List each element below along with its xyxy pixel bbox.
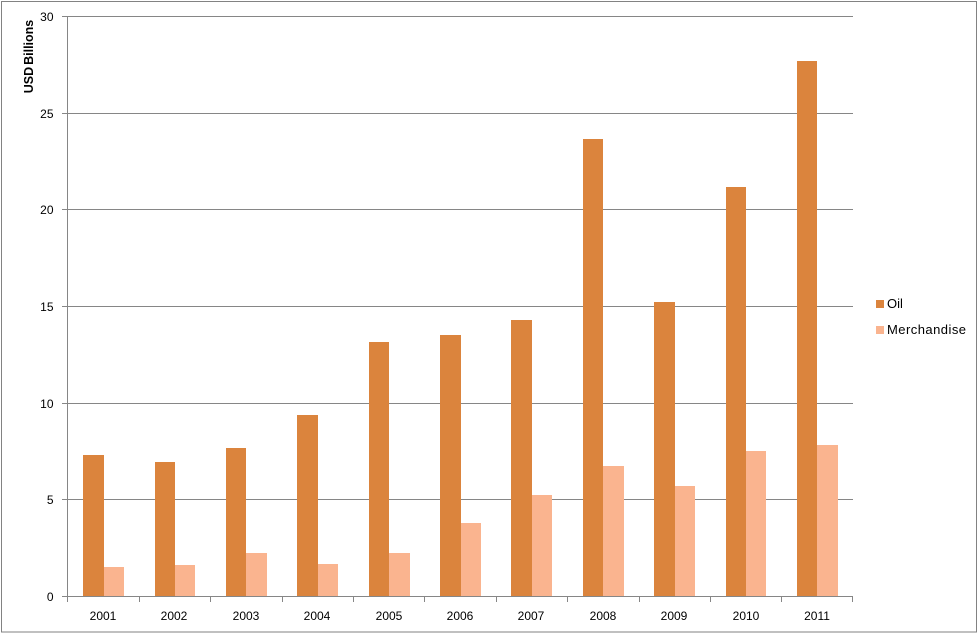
- y axis labels: [40, 10, 54, 604]
- x axis labels: 2011: [804, 609, 830, 623]
- legend: Merchandise: [887, 322, 966, 337]
- y axis labels: 15: [40, 300, 54, 314]
- x axis labels: 2006: [447, 609, 474, 623]
- y axis labels: 20: [40, 203, 54, 217]
- oil bars: [83, 61, 817, 596]
- y axis labels: 25: [40, 107, 54, 121]
- x axis labels: [90, 609, 830, 623]
- legend: [876, 296, 966, 337]
- x axis labels: 2002: [161, 609, 188, 623]
- x axis labels: 2003: [233, 609, 260, 623]
- y axis title: USD Billions: [22, 20, 36, 93]
- x axis labels: 2007: [518, 609, 545, 623]
- x axis labels: 2009: [661, 609, 688, 623]
- y axis labels: 30: [40, 10, 54, 24]
- legend: Oil: [887, 296, 903, 311]
- y axis labels: 10: [40, 397, 54, 411]
- y axis labels: 0: [47, 590, 54, 604]
- x axis labels: 2005: [376, 609, 403, 623]
- x axis labels: 2008: [590, 609, 617, 623]
- x axis labels: 2004: [304, 609, 331, 623]
- x axis labels: 2001: [90, 609, 117, 623]
- y axis labels: 5: [47, 493, 54, 507]
- x axis labels: 2010: [733, 609, 760, 623]
- merchandise bars: [104, 445, 838, 596]
